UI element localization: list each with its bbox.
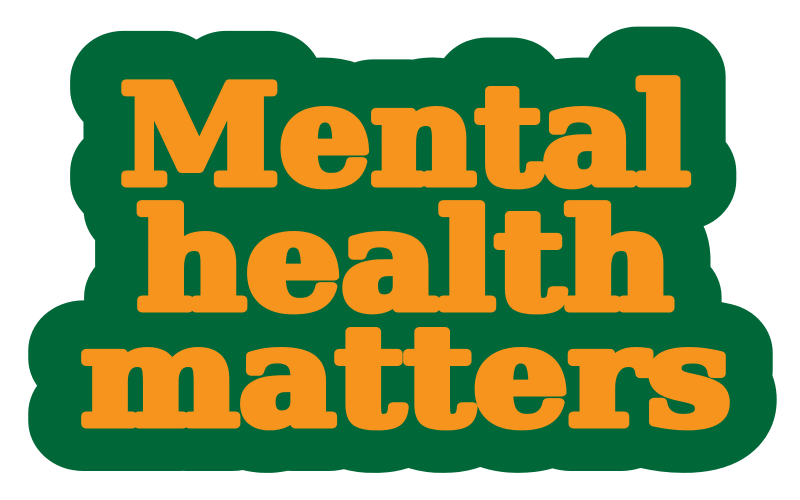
green sticker outline: matters	[78, 294, 728, 454]
green sticker outline: Mental	[117, 53, 687, 213]
title: Mental health matters: matters	[81, 297, 731, 457]
title: Mental health matters	[81, 56, 731, 457]
title: Mental health matters: health	[137, 181, 673, 341]
green sticker outline	[78, 53, 728, 454]
title: Mental health matters: Mental	[120, 56, 690, 216]
green sticker outline: health	[134, 178, 670, 338]
